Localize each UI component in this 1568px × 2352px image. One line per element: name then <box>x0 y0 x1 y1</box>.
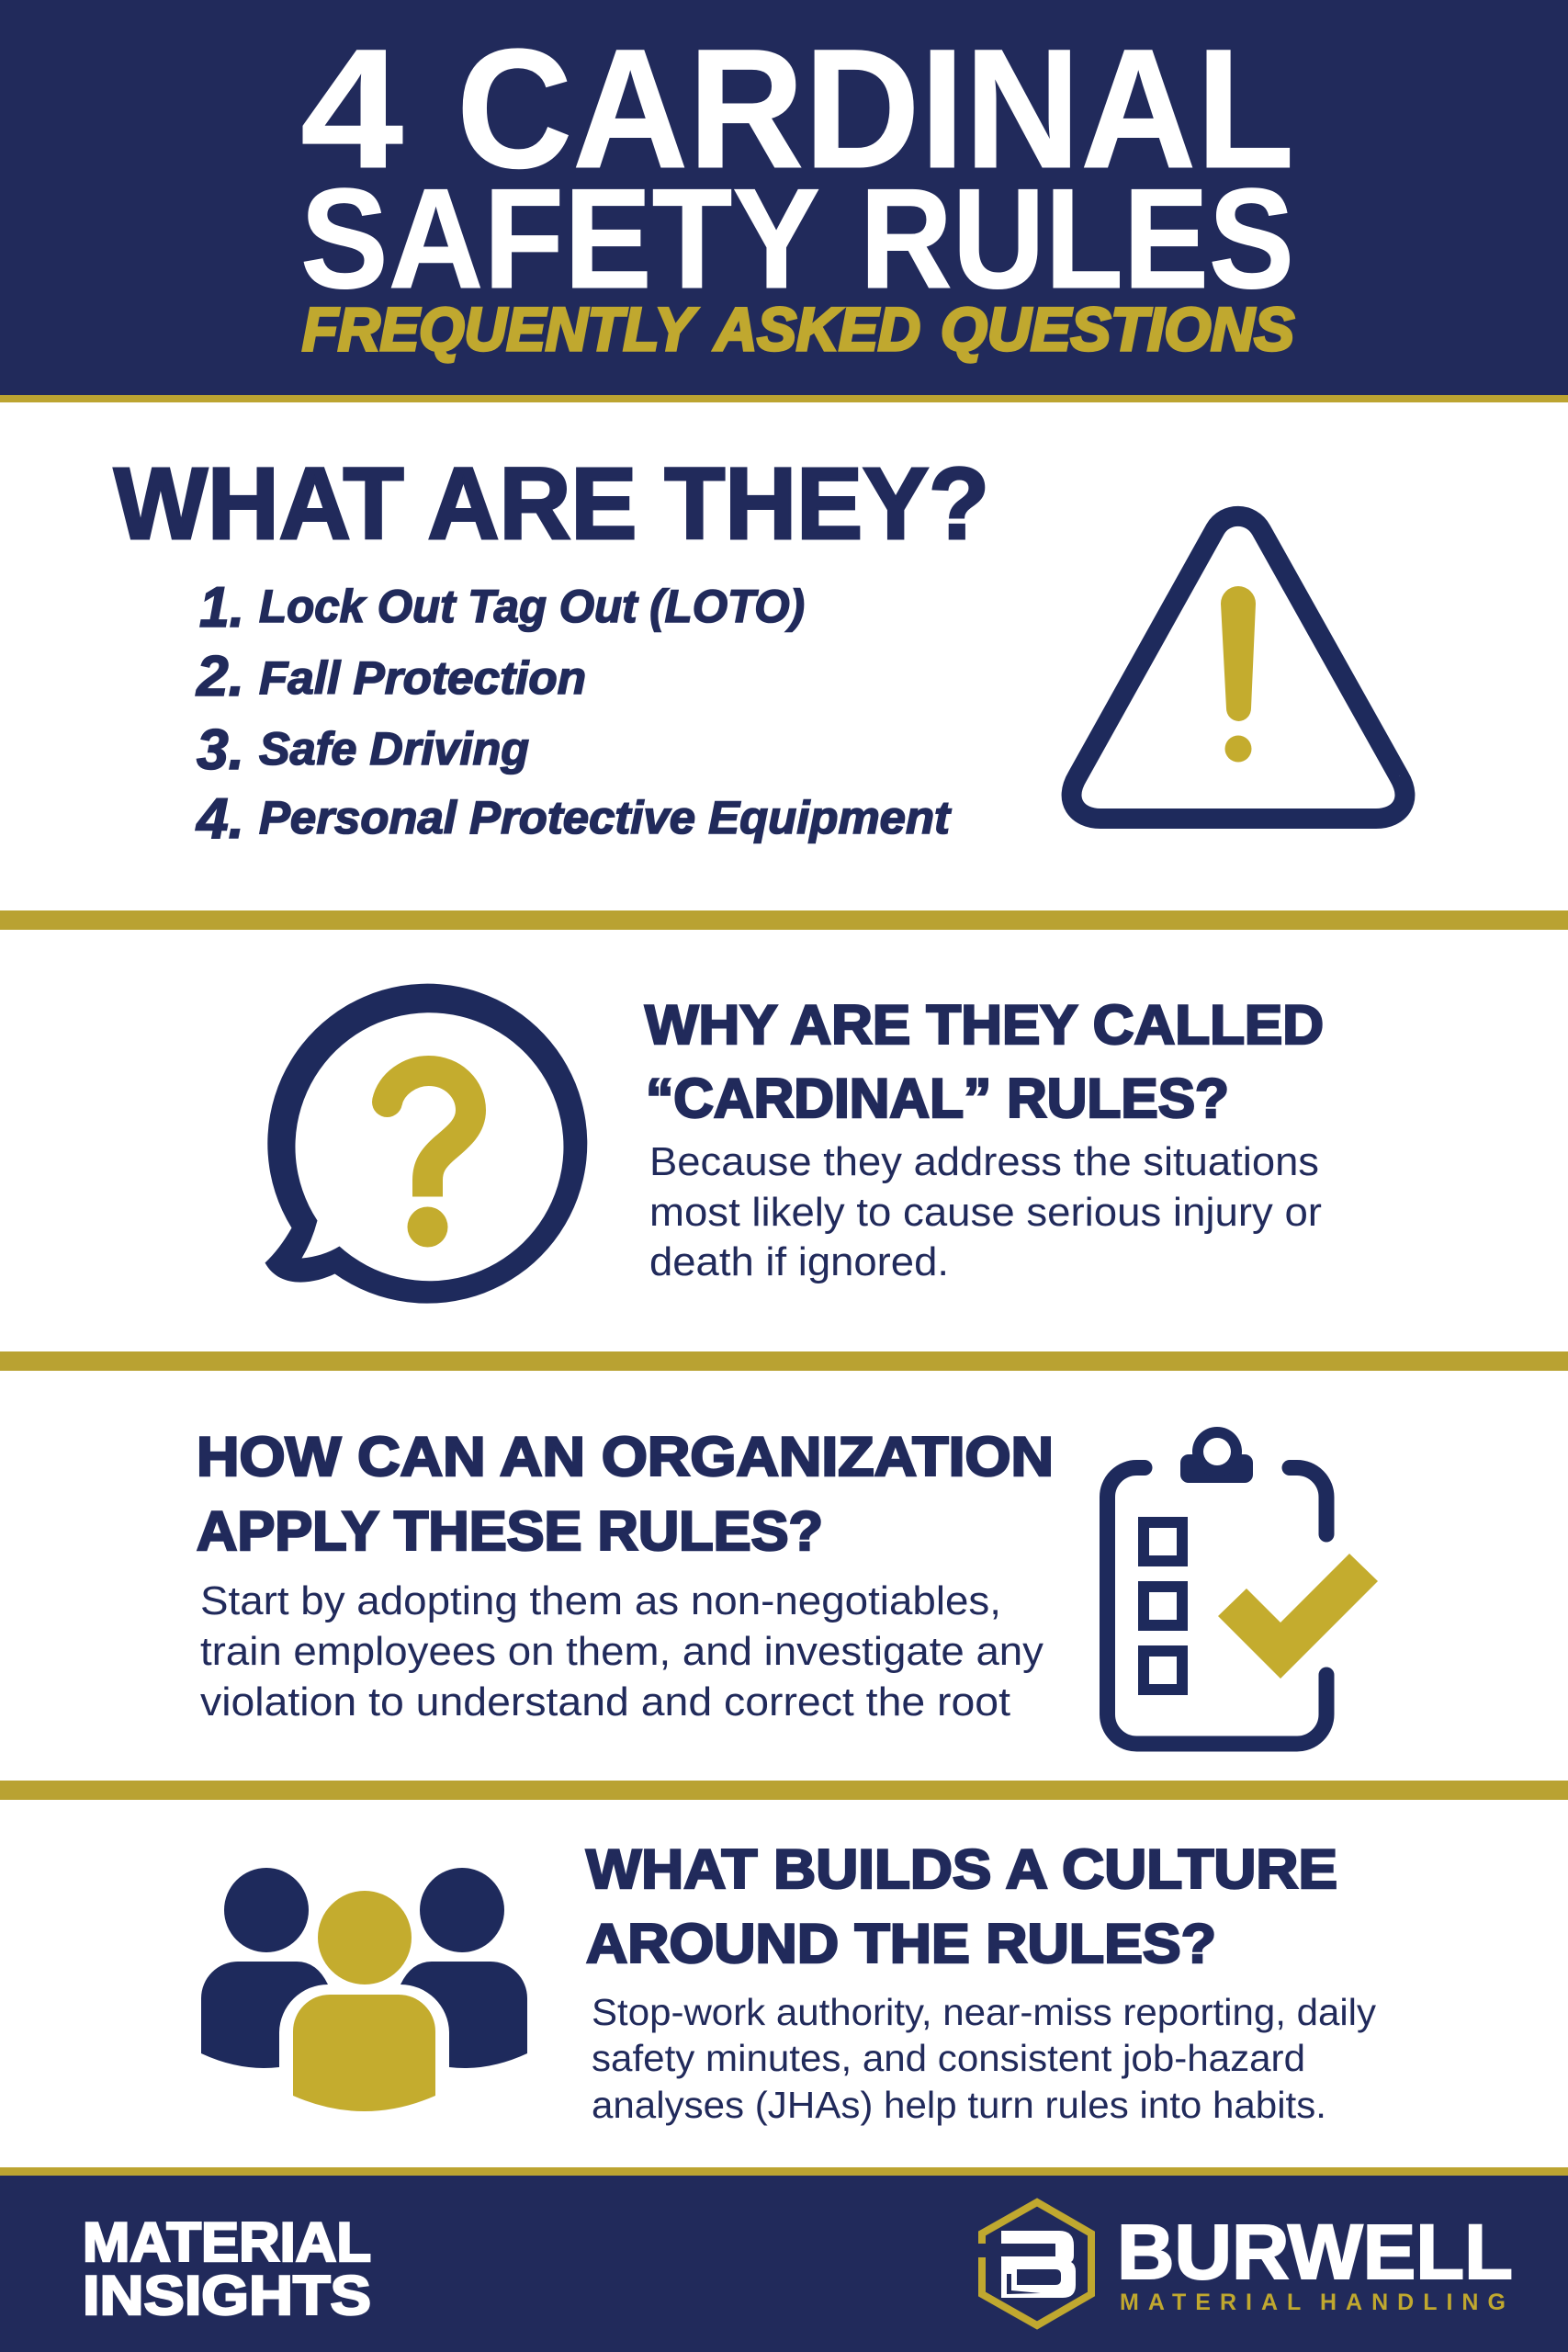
footer label: material insights <box>83 2211 371 2326</box>
panel: header banner <box>0 0 1568 396</box>
numbered list of rules: 1. <box>199 576 244 639</box>
text block: why answer <box>649 1139 1322 1284</box>
icon: group of people <box>201 1868 527 2111</box>
logo mark: hexagon with B <box>982 2202 1091 2325</box>
numbered list of rules <box>195 576 952 851</box>
heading: what builds a culture: AROUND THE RULES? <box>586 1913 1216 1974</box>
footer label: material insights: MATERIAL <box>83 2211 371 2273</box>
title: 4 <box>300 15 403 204</box>
title <box>300 15 1294 318</box>
panel: why cardinal <box>265 984 1324 1304</box>
heading: what builds a culture: WHAT BUILDS A CULTURE <box>586 1838 1337 1900</box>
text block: culture answer: analyses (JHAs) help turn rules into habits. <box>592 2084 1326 2126</box>
numbered list of rules: 2. <box>196 645 244 708</box>
numbered list of rules: Safe Driving <box>259 723 529 775</box>
icon: speech bubble with question mark <box>265 984 587 1304</box>
text block: why answer: death if ignored. <box>649 1239 949 1284</box>
heading: how can an organization apply these rules: APPLY THESE RULES? <box>197 1500 823 1562</box>
text block: culture answer: safety minutes, and consistent job-hazard <box>592 2037 1305 2079</box>
logo wordmark: BURWELL <box>1117 2209 1513 2295</box>
logo tagline: HANDLING <box>1320 2290 1515 2315</box>
numbered list of rules: Lock Out Tag Out (LOTO) <box>259 581 805 632</box>
divider: gold bar three <box>0 1781 1568 1800</box>
heading: what builds a culture <box>586 1838 1337 1974</box>
text block: why answer: most likely to cause serious injury or <box>649 1190 1322 1235</box>
logo tagline <box>1120 2290 1515 2315</box>
numbered list of rules: Personal Protective Equipment <box>259 792 952 843</box>
title: CARDINAL <box>457 15 1294 204</box>
divider: header gold bar <box>0 395 1568 402</box>
divider: gold bar one <box>0 910 1568 930</box>
logo: burwell material handling <box>982 2202 1515 2325</box>
title: RULES <box>860 159 1294 318</box>
panel: how to apply <box>197 1426 1378 1744</box>
subtitle: FREQUENTLY <box>302 295 698 363</box>
heading: what are they: WHAT ARE THEY? <box>114 447 989 560</box>
heading: why are they called cardinal rules: “CARDINAL” RULES? <box>646 1068 1229 1129</box>
subtitle <box>302 295 1294 363</box>
heading: why are they called cardinal rules: WHY ARE THEY CALLED <box>645 994 1324 1056</box>
divider: gold bar two <box>0 1351 1568 1371</box>
numbered list of rules: 4. <box>195 787 244 851</box>
subtitle: ASKED <box>713 295 920 363</box>
heading: how can an organization apply these rules <box>197 1426 1054 1562</box>
panel: what are they <box>114 447 1404 851</box>
text block: how answer: violation to understand and correct the root <box>200 1679 1010 1724</box>
logo tagline: MATERIAL <box>1120 2290 1310 2315</box>
footer label: material insights: INSIGHTS <box>83 2265 371 2326</box>
icon: clipboard checklist <box>1107 1427 1378 1744</box>
panel: culture <box>201 1838 1377 2126</box>
text block: how answer: Start by adopting them as non-negotiables, <box>200 1578 1001 1623</box>
heading: why are they called cardinal rules <box>645 994 1324 1129</box>
title: SAFETY <box>300 159 820 318</box>
text block: culture answer: Stop-work authority, near-miss reporting, daily <box>592 1991 1377 2033</box>
text block: culture answer <box>592 1991 1377 2126</box>
panel: footer <box>0 2167 1568 2352</box>
text block: how answer: train employees on them, and investigate any <box>200 1629 1043 1674</box>
icon: warning triangle <box>1072 516 1404 819</box>
numbered list of rules: 3. <box>197 718 244 782</box>
heading: how can an organization apply these rules: HOW CAN AN ORGANIZATION <box>197 1426 1054 1487</box>
text block: how answer <box>200 1578 1043 1724</box>
numbered list of rules: Fall Protection <box>259 652 586 704</box>
text block: why answer: Because they address the situations <box>649 1139 1319 1184</box>
subtitle: QUESTIONS <box>941 295 1294 363</box>
